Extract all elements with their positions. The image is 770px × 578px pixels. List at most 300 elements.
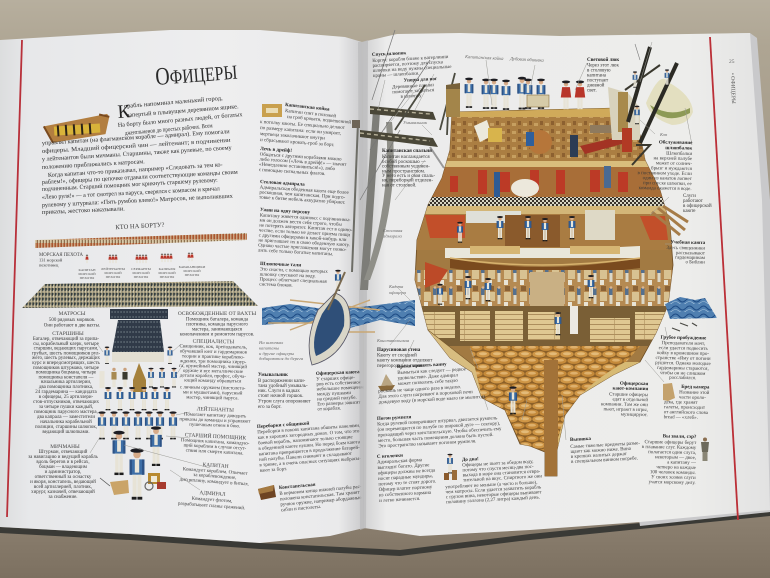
text: sailors: Они работают в две вахты. — [44, 324, 100, 328]
text: lowering boats — [372, 49, 453, 79]
intro text — [42, 95, 244, 216]
text: petty officers: СТАРШИНЫ — [52, 331, 84, 337]
text: midshipmen: МИЧМАНЫ — [50, 444, 80, 450]
text: lowering boats: краны — шлюпбалки. — [373, 72, 420, 79]
intro text: джентльменов до простых рабочих. Всем — [125, 122, 213, 137]
illustration: ship cross-section — [410, 77, 680, 476]
text: skylight: Через этот люк — [587, 64, 619, 68]
text: petty officers: грубых, шесть помощников рул- — [32, 351, 100, 356]
text: ballast: в крепких налитых держат — [571, 452, 628, 460]
title: ОФИЦЕРЫ — [154, 58, 238, 91]
text: rude awakening: чтобы он не слишком — [660, 371, 706, 377]
text: gunroom: сабли и пистолеты. — [281, 505, 321, 513]
text: canvas wall: каюту компании отделяют — [377, 358, 433, 364]
text: washstand: В распоряжении капи- — [258, 379, 306, 384]
text: captain's cot: на гроб кровати, подвешенной — [287, 115, 351, 126]
text: dinner for one: честве, если только не делает приема пищи — [259, 228, 351, 238]
text: off watch: Помощник баталера, команда — [186, 318, 249, 322]
text: tiller sweep: Когда рулевой поворачивает штурвал, двигается румпель — [377, 416, 498, 427]
leader lines right page — [378, 42, 692, 440]
shadow under the book — [0, 512, 770, 556]
label: yard: Кэп — [659, 132, 668, 137]
text: dinner for one: Капитану живется одиноко: с подчиненны- — [260, 213, 351, 223]
marine officer labels: ПЕХОТЫ — [80, 276, 94, 280]
text: you called, sir: У своих хозяев слуги — [651, 475, 696, 481]
text: servants: работают — [683, 199, 704, 204]
text: dinner for one: ми он должен вести себя строго, чтобы — [259, 218, 343, 228]
illustration: sea with longboat — [262, 270, 415, 365]
text: petty officers: помощник парусного мастера, — [34, 410, 98, 415]
text: spick and span: С иголочки — [377, 454, 403, 460]
text: bottoms up: До дна! — [462, 457, 479, 463]
text: time for a bath: дождевую воду (в морской воде мыло не мылится). — [379, 395, 486, 405]
marine officer labels: КАПИТАН — [79, 268, 96, 272]
text: admiral's dining — [259, 180, 350, 206]
label: washstand: Умывальник — [403, 120, 428, 125]
illustration: sea right — [665, 297, 717, 319]
text: spick and span: выглядит богато. Другие — [377, 463, 430, 471]
text: classroom: Здесь священники — [666, 246, 705, 252]
text: specialists: Священник, кок, преподаватель, — [179, 344, 247, 351]
text: bread room: от английского слова — [664, 410, 709, 416]
text: officer's cabin: от корабля. — [317, 406, 341, 412]
text: time for a bath: Для этого слуги нагревают в пороховой печи — [378, 390, 473, 400]
text: specialists: с личным оружием (пистолета- — [180, 385, 246, 392]
text: midshipmen: вдоль берегов и в рейсах, — [36, 460, 90, 465]
text: gunroom: Констапельская — [279, 483, 316, 491]
text: skylight — [587, 58, 619, 94]
illustration: boat on davits — [608, 44, 693, 165]
label: officer's cabin: офицера — [389, 290, 407, 295]
label: admiral's dining: адмирала — [383, 234, 403, 238]
page stack right — [560, 33, 770, 526]
text: first lieutenant: ствия или смерти капитана. — [186, 448, 244, 457]
text: ballast: в специальном винном погребе. — [571, 456, 638, 465]
text: foot rests: Деревянные планки — [392, 83, 434, 90]
text: rude awakening: Грубое пробуждение — [660, 336, 707, 341]
text: boat tackle: Шлюпочные тали — [260, 262, 301, 268]
text: midshipmen: за навигацию и ведущий корабль — [28, 455, 99, 460]
text: petty officers: начальника артиллерии, — [41, 380, 91, 385]
text: bulkheads: Переборки с общинкой — [257, 422, 310, 430]
text: petty officers: полиции, старшины шлюпок, — [35, 425, 97, 430]
text: you called, sir: 100 человек команды. — [650, 470, 696, 476]
text: you called, sir: Вы звали, сэр? — [663, 434, 697, 440]
text: captain's bedroom: Капитан наслаждается — [382, 155, 430, 160]
text: skylight: свет. — [587, 88, 597, 94]
caption: boats: На шлюпках — [258, 340, 283, 345]
text: dinner for one: Однако частые приглашения могут позво- — [258, 243, 347, 253]
text: captain — [180, 461, 250, 487]
text: petty officers: начальника корабельной — [40, 420, 92, 425]
text: petty officers: ведающий шлюпками. — [42, 430, 90, 435]
text: petty officers: старшин, ведающих парусами, — [34, 347, 98, 352]
text: bread room — [663, 383, 710, 421]
text: captain: Командует кораблем. Отвечает — [183, 467, 249, 477]
text: gunroom — [258, 479, 363, 513]
text: washstand: Утром слуга опорожняет — [258, 400, 311, 404]
text: dinner for one: не приглашает их в свою обеденную каюту. — [258, 238, 350, 248]
label: oak panelling: Дубовая обшивка — [509, 56, 545, 63]
text: dinner for one — [258, 208, 354, 258]
text: bread room: галеты, происходит — [664, 405, 706, 411]
icon: small ship section — [43, 114, 111, 143]
text: bulkheads: в обеденной каюте пушки. Но перед боем каюта — [258, 440, 361, 452]
text: gunroom company: кают-компания — [612, 387, 649, 392]
text: captain's cot: по размеру капитана: если он умирает, — [260, 126, 341, 137]
text: davit maintenance: в постоянном уходе. Если — [637, 171, 692, 177]
text: rude awakening — [655, 336, 712, 381]
text: sailors: МАТРОСЫ — [59, 311, 86, 317]
text: midshipmen: боцман — владеющим — [39, 465, 88, 470]
text: captain's cot: Капитанская койка — [285, 103, 330, 113]
red margin line right — [710, 37, 738, 520]
text: davit maintenance: брызг и нуждаются — [651, 166, 693, 172]
text: specialists: ющий команду обращаться — [184, 379, 242, 385]
petty officer columns — [112, 320, 164, 352]
text: boat tackle: Это снасти, с помощью которых — [260, 267, 328, 275]
sailors on quarterdeck — [465, 77, 545, 110]
text: skylight: поступает — [587, 78, 609, 84]
text: time for a bath: Время принять ванну — [397, 362, 447, 370]
text: bread room: дека, где хранят — [664, 400, 698, 406]
text: you called, sir — [641, 434, 709, 486]
text: rude awakening: если удается подвесить — [659, 346, 709, 352]
text: lieutenants — [179, 404, 252, 430]
text: bread room: Название этой — [679, 390, 710, 396]
text: bottoms up: чем матросы. Если удается захватить корабль — [446, 485, 542, 495]
text: skylight: дневной — [587, 84, 605, 88]
text: dinner for one: не потерять авторитет. Капитан ест в одино- — [259, 223, 353, 233]
text: midshipmen: за снабжение. — [48, 495, 78, 500]
sailor on barrels — [509, 386, 517, 414]
text: rude awakening: Преподаватели мачт, — [661, 341, 705, 347]
text: foot rests: Упоры для ног — [404, 77, 438, 84]
figures: crew rows — [98, 346, 177, 439]
text: sailors — [44, 311, 100, 328]
text: officer's cabin: Его размеры зависят — [317, 401, 361, 407]
marine officer labels: МОРСКОЙ — [78, 271, 96, 276]
text: petty officers: в офицеры, 25 артиллери- — [39, 395, 94, 400]
poop tower and railing — [446, 83, 549, 117]
text: davit maintenance: команда окажется в воде. — [639, 186, 692, 192]
marine officer labels: КАПРАЛЫ — [159, 267, 175, 271]
figure: senior lieutenant — [150, 426, 162, 466]
text: heave to: «Немедленно остановиться!»), либо — [259, 162, 336, 172]
deck: hold with stacked planks — [410, 306, 680, 346]
marine officer labels: ПЕХОТЫ — [185, 273, 199, 277]
intro text: положению приближались к матросам. — [42, 158, 145, 171]
text: specialists: га, оружейный мастер, чинящий — [179, 364, 247, 370]
text: bread room: части ороло- — [679, 395, 706, 401]
text: foot rests — [392, 77, 439, 100]
text: ballast: Выпивка — [570, 437, 592, 443]
text: petty officers: помощника констапеля — — [39, 375, 94, 380]
text: tiller sweep: (он перемещается по палубе по широкой дуге — сектору), — [377, 422, 500, 433]
text: first lieutenant — [180, 430, 250, 457]
text: officer's cabin: между пушками — [317, 391, 351, 397]
text: captain's cot: и сбрасывают кровать-гроб за борт. — [260, 138, 335, 148]
marines on deck — [561, 80, 585, 109]
text: tiller sweep: Погон румпеля — [377, 415, 412, 422]
text: ballast — [570, 434, 641, 465]
marine officer labels: СЕРЖАНТЫ — [131, 267, 151, 271]
text: lieutenants: ЛЕЙТЕНАНТЫ — [197, 404, 234, 414]
marine officer labels: БАРАБАНЩИКИ — [179, 265, 206, 269]
figure: servant boy — [701, 438, 709, 461]
deck: gun deck — [410, 262, 680, 308]
marine officer labels: ПЕХОТЫ — [160, 275, 174, 279]
petty officers legs — [112, 352, 164, 362]
off-watch row — [110, 309, 168, 319]
text: captain's bedroom — [382, 149, 435, 188]
text: dinner for one: с другими офицерами в какой-нибудь или — [259, 233, 347, 243]
text: petty officers: курс и впередсмотрящих, шесть — [32, 361, 101, 366]
text: gunroom company: компании. Там же они — [601, 402, 648, 408]
text: petty officers: 24 гардемарина — кандидата — [35, 390, 98, 395]
text: rude awakening: койку в кромешном про- — [657, 351, 709, 357]
page number: 25 — [729, 59, 735, 65]
text: specialists — [178, 338, 248, 402]
text: davit maintenance — [637, 140, 693, 192]
text: washstand — [258, 373, 311, 410]
deck: white gaps and curved beam — [445, 246, 640, 270]
marine officers — [85, 253, 194, 263]
text: first lieutenant: Помощник капитана, командую- — [181, 438, 250, 447]
text: specialists: обучавший юнг и гардемаринов — [180, 349, 248, 356]
text: time for a bath: Вымыться как следует — редкое — [397, 367, 467, 376]
icon: chest — [258, 485, 276, 500]
intro text: орабль напоминал маленький город, — [124, 95, 223, 110]
marine officer labels: ПЕХОТЫ — [134, 275, 148, 279]
text: davit maintenance: один из канатов лопнет — [643, 176, 693, 182]
text: washstand: стоят ночной горшок. — [258, 394, 304, 399]
marine officer labels: ЛЕЙТЕНАНТЫ — [101, 266, 125, 271]
text: canvas wall — [377, 348, 433, 369]
text: specialists: оружие и все металлические — [183, 369, 244, 375]
text: spick and span: и легко начинается. — [379, 497, 420, 504]
text: boat tackle — [259, 262, 329, 290]
text: servants: каюте — [683, 209, 696, 214]
label: gunroom: Констапельская — [376, 338, 409, 343]
marine officer labels: МОРСКОЙ — [132, 270, 150, 275]
text: petty officers: Баталер, отвечающий за припа- — [33, 337, 99, 342]
red margin line left — [7, 40, 22, 517]
text: tiller sweep: место, большая часть помещения должна быть пустой. — [378, 433, 494, 444]
text: marines: 131 морской — [39, 258, 63, 262]
text: canvas wall: Парусиновая стена — [377, 348, 421, 353]
text: captain's bedroom: особой роскошью — — [382, 160, 426, 165]
text: captain's bedroom: ная от столовой. — [382, 184, 416, 188]
text: midshipmen: хирург, казначей, отвечающий — [31, 490, 95, 495]
text: time for a bath: удовольствие. Даже адмирал — [397, 373, 459, 381]
text: admiral: Командует флотом, — [192, 497, 232, 504]
panel: left page — [0, 30, 366, 543]
text: rude awakening: рушится. Однако молодые — [655, 361, 712, 367]
text: gunroom company: едят в отдельной — [612, 398, 648, 403]
text: gunroom company: Офицерская — [620, 382, 649, 387]
text: officer's cabin: У старших офице- — [316, 376, 355, 382]
text: off watch: ОСВОБОЖДЕННЫЕ ОТ ВАХТЫ — [178, 311, 256, 317]
text: classroom — [666, 240, 706, 266]
text: midshipmen: и якоря, констапель, ведающий — [30, 480, 96, 485]
panel: right page — [362, 33, 770, 536]
text: lowering boats: Корпус корабля ближе к ватерлинии — [372, 55, 449, 64]
text: bottoms up — [444, 454, 544, 505]
text: gunroom company: пьют, играют в игры, — [603, 407, 648, 413]
text: off watch: плотника, команда парусного — [186, 322, 248, 328]
text: davit maintenance: на верхней палубе — [653, 156, 693, 162]
intro text: рулевому у штурвала: «Пять румбов влево!» Матросов, не выполнявших — [42, 193, 234, 209]
text: spick and span: Офицер платит портному — [379, 485, 433, 493]
text: tiller sweep: Это пространство называют погоном румпеля. — [378, 439, 476, 449]
text: heave to: Лечь в дрейф! — [260, 147, 292, 154]
text: rude awakening: странстве «Яму от погони — [656, 356, 711, 362]
text: specialists: мастер, чинящий паруса. — [186, 396, 239, 401]
marines row — [35, 233, 247, 248]
intro text: На борту было много разных людей, от богатых — [118, 111, 244, 129]
text: midshipmen — [28, 444, 99, 500]
hull planking strip — [428, 330, 482, 398]
text: officer's cabin: Офицерская каюта — [316, 370, 360, 377]
text: midshipmen: и администратор, — [45, 470, 81, 475]
caption: boats — [258, 340, 304, 361]
text: servants — [683, 194, 712, 214]
text: davit maintenance: при спуске шлюпки, ее — [643, 181, 692, 187]
text: captain's bedroom: Капитанская спальня — [382, 149, 432, 154]
text: admiral's dining: роскошная, чем капитанская. При подго- — [259, 190, 346, 201]
text: heave to — [259, 147, 348, 178]
text: first lieutenant: СТАРШИЙ ПОМОЩНИК — [185, 430, 247, 442]
text: foot rests: в шлюпку — [400, 94, 422, 100]
text: davit maintenance: Шлюпбалки — [666, 152, 693, 157]
text: midshipmen: ответственный за оснастку — [35, 475, 92, 480]
icon: bath ship — [378, 374, 395, 391]
icon: cot — [262, 104, 282, 117]
drop cap: К — [117, 101, 131, 123]
text: canvas wall: перегородка из ткани. — [377, 364, 423, 369]
text: bulkheads: в трюме, а в очень опасных ситуациях выбрасы- — [259, 457, 362, 468]
text: classroom: гардемаринам — [675, 256, 706, 261]
text: petty officers: жего, шесть рулевых, держащих — [31, 356, 100, 361]
text: you called, sir: некоторым — двое, — [655, 455, 696, 461]
text: officer's cabin — [316, 370, 366, 412]
fish — [672, 323, 697, 331]
text: bottoms up: потому что спустя месяц-два пос- — [462, 465, 534, 473]
text: time for a bath — [377, 360, 486, 405]
text: lowering boats: шлюпки на воду нужны специальные — [373, 65, 452, 74]
text: gunroom: В кормовом конце нижней палубы рас- — [279, 485, 362, 497]
text: bulkheads: боевой корабль, напоминают только стоящие — [258, 435, 354, 446]
text: heave to: либо голосом («Лечь в дрейф!» — значит — [259, 157, 347, 168]
text: petty officers: стов-отпускников, отвечающих — [33, 400, 99, 405]
deck: red cabin — [420, 161, 670, 206]
text: you called, sir: четверо на каждые — [656, 465, 697, 471]
intro text: офицеры. Младший офицерский чин — лейтенант; в подчинении — [42, 137, 232, 155]
text: admiral: разрабатывает планы сражений. — [178, 502, 245, 511]
text: washstand: его за борт. — [258, 405, 282, 410]
caption: boats: капитаны — [259, 346, 279, 350]
text: specialists: ми и мушкетами), парусный — [183, 390, 243, 397]
text: davit maintenance: шлюпбалок — [665, 146, 692, 152]
text: boat tackle: шлюпку спускают на воду. — [260, 272, 316, 279]
label: officer's cabin: Каюта — [388, 284, 404, 289]
barrels in the hold — [470, 346, 640, 450]
intro text: Когда капитан что-то приказывал, например «Следовать за тем ко- — [48, 161, 223, 179]
text: lieutenants: приказы до команды и управляют — [179, 417, 251, 425]
caption: boats: и другие офицеры — [259, 351, 294, 356]
text: lieutenants: Помогают капитану доводить — [184, 412, 247, 420]
text: time for a bath: роскошь не чаще одного раза в неделю. — [378, 385, 461, 395]
text: lowering boats: расширяется, поэтому для спуска — [372, 60, 444, 69]
text: captain's bedroom: ня, переборкой отделен- — [382, 179, 433, 184]
text: admiral's dining: Столовая адмирала — [260, 180, 305, 188]
text: tiller sweep — [377, 410, 503, 449]
text: captain's bedroom: ным пространством. — [382, 169, 425, 174]
deck: upper cabin — [447, 108, 646, 161]
leader lines left page — [90, 345, 210, 490]
text: petty officers: помощника боцмана, четыре — [36, 371, 97, 376]
keel — [544, 360, 558, 476]
text: you called, sir: Старшие офицеры берут — [644, 440, 697, 446]
text: skylight: капитана — [587, 74, 607, 78]
text: bottoms up: употребляют не меньше (а часто и больше), — [445, 481, 538, 490]
text: dinner for one: лить себе только богатые капитаны. — [258, 248, 333, 257]
intro text: у лейтенантов были мичманы. Старшины, также как рулевые, по своему — [42, 144, 233, 163]
text: gunroom company — [601, 381, 649, 418]
text: bulkheads: вают за борт. — [260, 467, 287, 474]
text: tiller sweep: проходящий через констапельскую. Чтобы обеспечить ему — [378, 427, 502, 438]
text: spick and span: Адмиральская форма — [377, 458, 423, 465]
intro text: запертый в плывущем деревянном ящике. — [127, 103, 239, 119]
text: ballast: Самые тяжелые предметы разме- — [570, 441, 640, 450]
text: davit maintenance: Обслуживание — [659, 140, 693, 146]
label: officer's cabin — [388, 284, 407, 295]
text: captain's bedroom: собственным уединен- — [382, 164, 430, 170]
text: you called, sir: полагается один слуга, — [648, 450, 696, 456]
officer attributes: chests and charts — [100, 473, 166, 495]
text: time for a bath: может позволить себе такую — [398, 379, 458, 387]
text: admiral's dining: Адмиральская обеденная каюта еще более — [260, 185, 350, 196]
figure: admiral — [130, 448, 144, 500]
text: bottoms up: тительной на вкус. Спиртного же они — [463, 474, 543, 483]
text: dinner for one: Ужин на одну персону — [260, 208, 311, 216]
text: davit maintenance: может от солнеч- — [656, 161, 692, 167]
text: spick and span: носят парадные мундиры, — [378, 474, 433, 482]
caption: boats: добираются до берега — [259, 356, 304, 361]
text: classroom: Учебная каюта — [670, 240, 706, 246]
text: boat tackle: система блоков. — [259, 282, 293, 289]
text: bulkheads: капитана превращается в продолжение батарей- — [259, 446, 360, 457]
text: captain's cot: Капитан спит в похожей — [285, 109, 337, 119]
text: skylight: в столовую — [587, 68, 611, 74]
text: captain's bedroom: У него есть и своя спаль- — [382, 174, 435, 179]
text: midshipmen: Штурман, отвечающий — [39, 450, 88, 455]
marine officer labels — [78, 265, 206, 280]
text: you called, sir: учатся морскому делу. — [649, 480, 696, 486]
deck: middle — [415, 206, 675, 250]
text: admiral: АДМИРАЛ — [199, 490, 226, 498]
text: boat tackle: Процесс облегчает специальная — [259, 277, 327, 285]
text: bulkheads: как в хороших загородных домах. О том, что это — [258, 429, 360, 441]
text: washstand: ник. Слуги в кадках — [258, 389, 300, 394]
text: you called, sir: а капитану — — [667, 460, 696, 466]
text: foot rests: помогают забраться — [392, 88, 435, 95]
intro text: «Лево руля!» — а тот смотрел на паруса, сверялся с компасом и кричал — [42, 185, 220, 201]
text: captain's cot — [260, 103, 351, 148]
text: petty officers: два помощника плотника, — [39, 385, 93, 390]
running head: • ОФИЦЕРЫ — [729, 73, 736, 104]
